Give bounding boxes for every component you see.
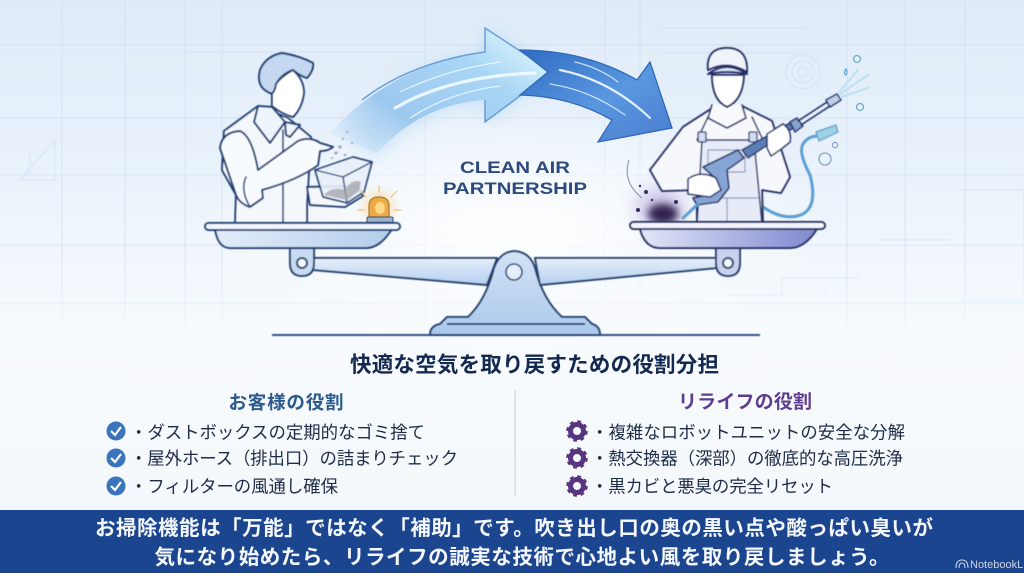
front hand — [688, 174, 721, 197]
beacon rays — [358, 186, 401, 210]
Relife role heading: リライフの役割 — [678, 391, 812, 413]
uniform — [650, 106, 790, 224]
beacon base — [367, 217, 393, 223]
customer role column — [106, 392, 458, 496]
water spray — [819, 56, 868, 165]
footer band — [0, 510, 1024, 573]
cap — [708, 48, 747, 72]
blueprint drawing lines — [0, 0, 1024, 345]
left hinge — [290, 246, 314, 276]
rear hand — [767, 124, 790, 156]
right beam — [535, 258, 717, 285]
warning beacon — [358, 186, 401, 223]
mold blot — [648, 204, 678, 224]
customer figure — [220, 53, 372, 224]
Relife role column — [568, 391, 905, 496]
gear item 1: ・複雑なロボットユニットの安全な分解 — [591, 422, 905, 442]
footer message: お掃除機能は「万能」ではなく「補助」です。吹き出し口の奥の黒い点や酸っぱい臭いが — [95, 516, 934, 540]
hand under box — [307, 186, 363, 207]
arrow: motion streaks — [395, 62, 650, 118]
column divider — [514, 390, 516, 496]
customer role heading: お客様の役割 — [228, 392, 344, 413]
gear item 2: ・熱交換器（深部）の徹底的な高圧洗浄 — [591, 448, 903, 468]
left pan — [205, 223, 400, 248]
arrow: dark descending segment — [520, 50, 672, 142]
shirt — [222, 106, 311, 224]
mold glow — [636, 188, 684, 228]
beacon glow — [363, 191, 395, 223]
gear item 3: ・黒カビと悪臭の完全リセット — [591, 476, 833, 496]
water hose — [763, 136, 818, 217]
left beam — [313, 258, 497, 285]
scale base and post — [430, 251, 600, 335]
hair — [259, 53, 313, 93]
arrow glow — [345, 28, 552, 158]
arrow: partnership flow — [330, 28, 672, 158]
technician figure — [650, 48, 841, 224]
face — [272, 70, 304, 117]
balance scale — [272, 246, 760, 335]
spray gun — [693, 150, 744, 205]
spray jets — [840, 70, 868, 97]
mold stain — [627, 160, 684, 228]
water droplets and bubbles — [819, 56, 864, 165]
collar — [254, 106, 300, 143]
partnership label — [443, 158, 587, 198]
check item 1: ・ダストボックスの定期的なゴミ捨て — [130, 422, 425, 442]
arrow: light rising segment — [330, 28, 552, 153]
arm — [220, 131, 333, 207]
white glow behind scale — [192, 100, 832, 360]
section title: 快適な空気を取り戻すための役割分担 — [350, 353, 719, 377]
hose coupler — [816, 125, 838, 141]
footer message — [95, 516, 934, 569]
beacon dome — [369, 197, 389, 218]
partnership label: PARTNERSHIP — [443, 179, 587, 198]
overalls — [697, 117, 763, 224]
dust box — [315, 157, 372, 203]
check item 3: ・フィルターの風通し確保 — [130, 476, 339, 496]
head — [712, 75, 744, 107]
dust particles — [331, 131, 353, 159]
pressure wand — [742, 123, 793, 158]
collar — [708, 105, 746, 128]
partnership label: CLEAN AIR — [460, 158, 570, 177]
right hinge — [716, 246, 740, 276]
right pan — [630, 222, 825, 248]
pivot — [447, 323, 585, 325]
mold spores — [636, 185, 678, 212]
footer message: 気になり始めたら、リライフの誠実な技術で心地よい風を取り戻しましょう。 — [154, 545, 890, 569]
ground line — [272, 334, 760, 336]
check item 2: ・屋外ホース（排出口）の詰まりチェック — [130, 448, 458, 468]
